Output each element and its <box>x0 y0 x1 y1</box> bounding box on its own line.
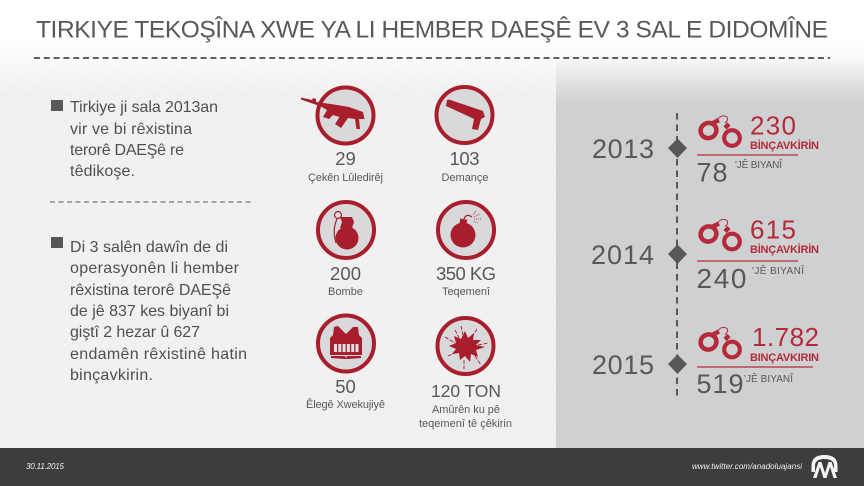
text block: operations: binçavkirin. <box>70 367 153 384</box>
label: bomb count: 350 KG <box>436 263 496 284</box>
timeline: 2013: 2013 <box>592 134 654 164</box>
label: pistol count: 103 <box>450 148 480 169</box>
panel: right timeline background <box>556 58 864 448</box>
label: explosive tonnage <box>419 381 512 430</box>
timeline: 2014: 2014 <box>591 240 654 270</box>
label: explosive tonnage: 120 TON <box>431 381 501 401</box>
timeline: 2015: BINÇAVKIRIN <box>750 352 819 364</box>
label: bomb count <box>436 263 496 298</box>
text block: operations: endamên rêxistinê hatin <box>70 346 247 363</box>
text block: intro: vir ve bi rêxistina <box>70 121 192 138</box>
text block: intro: têdikoşe. <box>70 163 135 180</box>
timeline: 2015: 1.782 <box>752 322 819 352</box>
timeline: 2015 <box>592 322 819 399</box>
footer bar: 30.11.2015 <box>26 462 65 471</box>
timeline: 2013: 'JÊ BIYANÎ <box>735 158 783 171</box>
text block: operations: Di 3 salên dawîn de di <box>70 239 228 256</box>
timeline: 2013: 78 <box>696 158 728 188</box>
timeline: 2015: 'JÊ BIYANÎ <box>744 372 794 385</box>
timeline: 2014: 615 <box>750 214 796 244</box>
label: rifle count: 29 <box>335 148 356 169</box>
text block: intro: Tirkiye ji sala 2013an <box>70 99 218 116</box>
timeline: 2013: 230 <box>750 110 796 140</box>
text block: intro <box>51 99 218 180</box>
label: grenade count: Bombe <box>328 286 363 298</box>
label: vest count: Êlegê Xwekujiyê <box>306 398 385 411</box>
label: explosive tonnage: Amûrên ku pê <box>432 404 500 416</box>
icon: pistol <box>436 87 492 143</box>
label: explosive tonnage: teqemenî tê çêkirin <box>419 418 512 430</box>
label: pistol count <box>442 148 488 184</box>
text block: operations <box>51 237 247 384</box>
label: vest count <box>306 376 385 411</box>
icon: rifle <box>301 88 374 144</box>
timeline: 2014: BİNÇAVKİRİN <box>750 243 819 256</box>
text block: operations: de jê 837 kes biyanî bi <box>70 303 229 320</box>
timeline: 2015: 2015 <box>592 350 654 380</box>
icon: bomb <box>438 202 494 258</box>
text block: operations: operasyonên li hember <box>70 260 240 277</box>
timeline: 2014: 240 <box>696 263 746 294</box>
timeline: 2014 <box>591 214 819 294</box>
label: grenade count <box>328 263 363 298</box>
timeline: 2013 <box>592 110 819 188</box>
label: rifle count: Çekên Lûledirêj <box>308 172 383 184</box>
icon: explosion <box>438 318 494 374</box>
icon: grenade <box>318 202 374 258</box>
text block: operations: giştî 2 hezar û 627 <box>70 324 200 341</box>
title: TIRKIYE TEKOŞÎNA XWE YA LI HEMBER DAEŞÊ EV 3 SAL E DIDOMÎNE <box>36 16 828 44</box>
icon: vest <box>318 316 374 372</box>
text block: intro: terorê DAEŞê re <box>70 142 184 159</box>
timeline: 2013: BİNÇAVKİRİN <box>750 139 819 152</box>
label: vest count: 50 <box>335 376 356 397</box>
timeline: 2015: 519 <box>696 369 744 399</box>
label: grenade count: 200 <box>330 263 361 284</box>
timeline: 2014: 'JÊ BIYANÎ <box>752 264 805 277</box>
label: bomb count: Teqemenî <box>442 286 491 298</box>
timeline axis <box>676 113 678 398</box>
footer bar: www.twitter.com/anadoluajansi <box>692 462 802 471</box>
text block: operations: rêxistina terorê DAEŞê <box>70 282 231 299</box>
icon: agency logo <box>812 455 838 478</box>
label: rifle count <box>308 148 383 184</box>
footer bar <box>0 448 864 486</box>
label: pistol count: Demançe <box>442 172 488 184</box>
